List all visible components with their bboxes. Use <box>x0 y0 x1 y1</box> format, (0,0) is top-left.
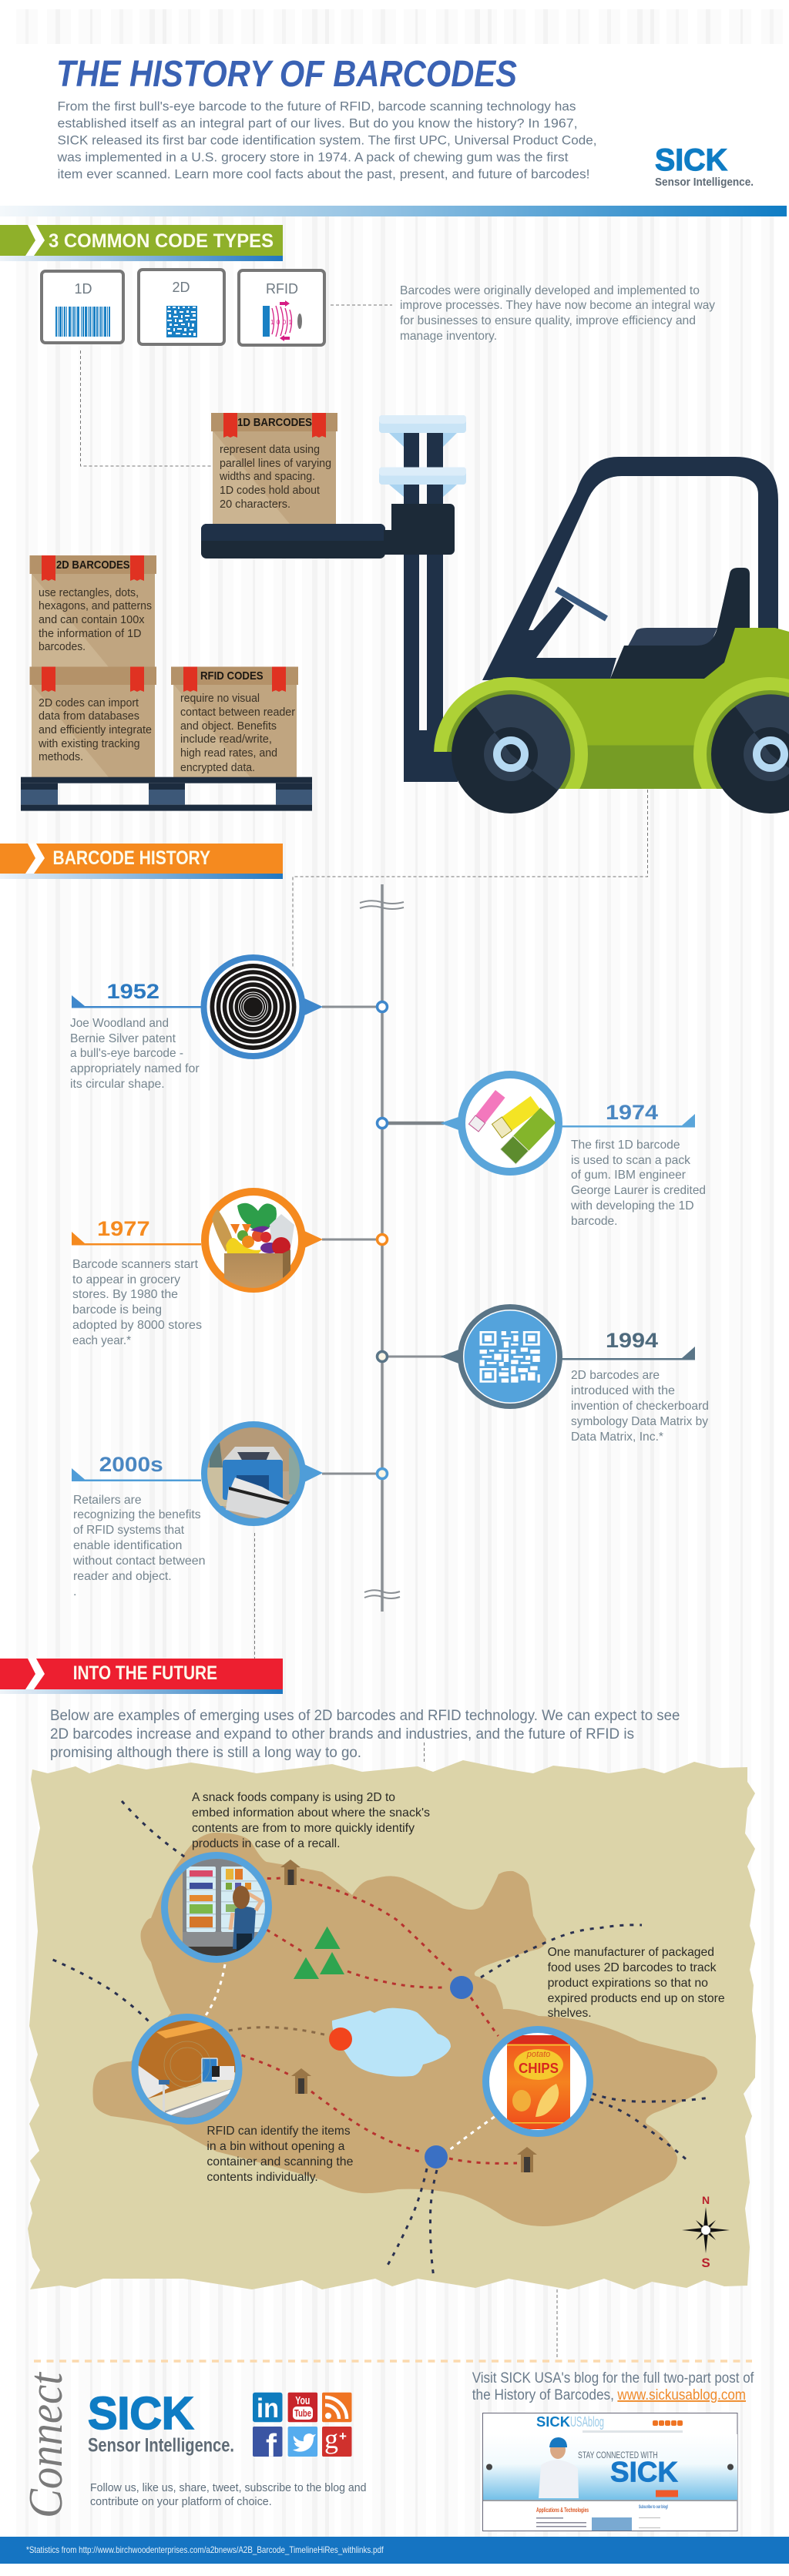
panel: treasure map <box>28 1760 756 2289</box>
follow us text: Follow us, like us, share, tweet, subscribe to the blog and <box>90 2481 367 2494</box>
huts <box>280 1860 537 2172</box>
rear fender <box>693 677 789 789</box>
map note: RFID bins <box>206 2125 354 2184</box>
compass: S <box>701 2256 710 2270</box>
SICK logo header <box>655 143 754 189</box>
icon: RFID reader photo <box>207 1427 300 1518</box>
box: RFID codes: and object. Benefits <box>180 719 277 733</box>
map note: RFID bins: container and scanning the <box>206 2155 354 2168</box>
intro paragraph: item ever scanned. Learn more cool facts about the past, present, and future of barcodes! <box>57 166 590 182</box>
panel: RFID code type: RFID <box>266 281 298 297</box>
screenshot hero <box>483 2434 737 2500</box>
blog screenshot: SICK <box>610 2456 678 2488</box>
compass <box>682 2194 730 2270</box>
map note: packaged food: product expirations so that no <box>548 1977 708 1990</box>
box: 2D barcodes top: and can contain 100x <box>39 613 145 626</box>
connector dashes <box>80 305 647 2360</box>
timeline: 1974: barcode. <box>571 1215 618 1228</box>
intro paragraph: From the first bull's-eye barcode to the future of RFID, barcode scanning technology has <box>57 99 576 114</box>
map note: snack foods <box>192 1791 430 1850</box>
timeline: 1994: 2D barcodes are <box>571 1369 660 1382</box>
connect divider <box>34 2360 752 2363</box>
box: RFID codes: include read/write, <box>180 733 272 746</box>
box: 2D barcodes bottom: with existing tracking <box>38 737 140 750</box>
photo: chips bag: CHIPS <box>519 2061 559 2076</box>
icon: YouTube: You <box>295 2394 310 2407</box>
lift forks light blue <box>379 415 466 497</box>
section header: 3 common code types <box>0 225 283 261</box>
timeline: 2000s: enable identification <box>73 1539 182 1552</box>
timeline: 2000s <box>72 1425 387 1598</box>
section header: into the future <box>0 1659 283 1694</box>
blog callout text: the History of Barcodes, <box>472 2387 614 2403</box>
icon: YouTube: Tube <box>294 2407 311 2419</box>
section header: into the future: INTO THE FUTURE <box>73 1662 217 1684</box>
blog callout text: Visit SICK USA's blog for the full two-part post of <box>472 2370 754 2386</box>
map paper <box>28 1760 756 2289</box>
map note: RFID bins: RFID can identify the items <box>206 2125 351 2138</box>
timeline: 1977: to appear in grocery <box>72 1273 180 1286</box>
box: 1D barcodes: 1D BARCODES <box>237 416 312 429</box>
panel: 1D code type: 1D <box>74 281 92 297</box>
timeline: 1974: with developing the 1D <box>570 1199 694 1213</box>
timeline: 1952: a bull's-eye barcode - <box>70 1047 183 1060</box>
box: RFID codes: contact between reader <box>180 706 295 719</box>
timeline: 1952: Joe Woodland and <box>70 1017 169 1030</box>
map note: RFID bins: contents individually. <box>206 2171 318 2184</box>
follow us text <box>90 2481 367 2508</box>
timeline: 1974: George Laurer is credited <box>571 1184 706 1197</box>
box: 2D barcodes top: 2D BARCODES <box>56 558 129 572</box>
mast <box>404 433 458 782</box>
carriage and fork arm <box>201 504 455 558</box>
timeline: 1952: its circular shape. <box>70 1078 165 1091</box>
icon: Twitter <box>288 2427 317 2457</box>
timeline: 1974: 1974 <box>606 1101 658 1124</box>
front wheel <box>452 694 570 813</box>
land mass <box>92 1833 717 2226</box>
front fender <box>434 677 588 789</box>
SICK logo header: SICK <box>655 143 727 177</box>
connect script heading: Connect <box>20 2371 72 2518</box>
icon: bull's-eye <box>200 954 305 1059</box>
photo: RFID bin <box>131 2014 243 2126</box>
timeline: 1977: each year.* <box>72 1334 131 1347</box>
photo: chips bag <box>482 2026 593 2137</box>
timeline: 1952 <box>70 954 387 1091</box>
intro paragraph: SICK released its first bar code identification system. The first UPC, Universal Product Code, <box>57 132 596 148</box>
SICK logo footer: Sensor Intelligence. <box>88 2434 234 2456</box>
map note: packaged food <box>548 1946 725 2020</box>
cab frame <box>482 457 778 680</box>
box: 1D barcodes: parallel lines of varying <box>220 457 331 470</box>
map note: snack foods: embed information about where the snack's <box>192 1806 430 1820</box>
icon: QR code <box>479 1331 540 1383</box>
map note: snack foods: A snack foods company is using 2D to <box>192 1791 395 1804</box>
routes red <box>242 1876 517 2163</box>
timeline: 2000s: recognizing the benefits <box>73 1508 201 1521</box>
map dots <box>329 1976 473 2168</box>
icon: LinkedIn: in <box>257 2393 279 2423</box>
timeline: 1974: The first 1D barcode <box>571 1139 680 1152</box>
timeline: 1952: 1952 <box>106 980 159 1003</box>
body <box>493 628 789 789</box>
screenshot logo: USAblog <box>570 2414 604 2430</box>
text: why barcodes: Barcodes were originally developed and implemented to <box>400 284 700 297</box>
map note: packaged food: One manufacturer of packaged <box>548 1946 714 1959</box>
timeline axis <box>360 884 404 1612</box>
box: 1D barcodes: 20 characters. <box>220 498 290 511</box>
timeline: 2000s: of RFID systems that <box>73 1524 185 1537</box>
timeline: 1994: symbology Data Matrix by <box>571 1415 708 1428</box>
icon: YouTube <box>288 2393 317 2422</box>
panel: RFID code type: 1001 <box>270 319 293 326</box>
text: why barcodes <box>400 284 715 343</box>
section header: barcode history: BARCODE HISTORY <box>52 847 210 869</box>
timeline: 2000s: 2000s <box>99 1453 163 1476</box>
forklift <box>201 415 789 831</box>
screenshot logo <box>536 2414 604 2430</box>
icon: Facebook: f <box>266 2427 277 2464</box>
panel: 2D code type <box>139 270 224 344</box>
map note: packaged food: food uses 2D barcodes to track <box>548 1961 717 1974</box>
panel: RFID code type <box>239 270 324 345</box>
blog screenshot <box>482 2413 737 2531</box>
box: 2D barcodes bottom <box>29 667 156 777</box>
SICK logo footer <box>88 2388 234 2456</box>
box: RFID codes: encrypted data. <box>180 761 255 774</box>
compass: N <box>702 2194 710 2206</box>
box: 2D barcodes bottom: and efficiently integrate <box>39 723 152 736</box>
text: why barcodes: for businesses to ensure quality, improve efficiency and <box>400 314 696 327</box>
panel: 2D code type: 2D <box>172 280 190 295</box>
icon: Google Plus <box>322 2423 351 2457</box>
timeline: 2000s: . <box>73 1585 76 1598</box>
intro paragraph: was implemented in a U.S. grocery store in 1974. A pack of chewing gum was the first <box>56 149 569 165</box>
box: 2D barcodes bottom: data from databases <box>39 709 139 723</box>
timeline: 1952: Bernie Silver patent <box>70 1032 176 1045</box>
timeline: 1977: Barcode scanners start <box>72 1258 199 1271</box>
text: why barcodes: manage inventory. <box>400 330 497 343</box>
timeline: 1994 <box>378 1304 709 1444</box>
map note: packaged food: expired products end up on store <box>548 1992 725 2005</box>
box: RFID codes: high read rates, and <box>180 746 277 760</box>
timeline: 1977: barcode is being <box>72 1303 162 1317</box>
text: future intro <box>50 1708 680 1761</box>
top gradient bar <box>0 206 787 216</box>
icon: Google Plus: + <box>339 2429 347 2444</box>
footer bar: *Statistics from http://www.birchwoodenterprises.com/a2bnews/A2B_Barcode_TimelineHiRes_withlinks.pdf <box>26 2544 384 2555</box>
timeline: 1974 <box>378 1075 706 1228</box>
trees <box>294 1927 344 1979</box>
timeline: 1974: is used to scan a pack <box>571 1154 691 1167</box>
seat <box>610 568 750 679</box>
pallet <box>21 777 312 811</box>
icon: Google Plus: g <box>324 2423 338 2454</box>
map note: snack foods: contents are from to more quickly identify <box>192 1822 415 1835</box>
blog screenshot: STAY CONNECTED WITH <box>578 2450 658 2460</box>
screenshot social <box>653 2420 683 2426</box>
photo: chips bag: potato <box>526 2050 550 2059</box>
title: THE HISTORY OF BARCODES <box>56 54 517 95</box>
section header: 3 common code types: 3 COMMON CODE TYPES <box>49 230 274 252</box>
box: RFID codes: RFID CODES <box>200 669 264 683</box>
screenshot man <box>539 2437 579 2498</box>
timeline: 1977: stores. By 1980 the <box>72 1288 178 1301</box>
box: 2D barcodes top: the information of 1D <box>39 627 142 640</box>
routes navy <box>53 1801 710 2278</box>
text: future intro: 2D barcodes increase and expand to other brands and industries, and the future of RFID is <box>50 1726 634 1742</box>
section header: barcode history <box>0 844 283 879</box>
box: RFID codes <box>171 667 298 777</box>
blog screenshot: Subscribe to our blog! <box>639 2505 668 2510</box>
screenshot logo: SICK <box>536 2414 570 2430</box>
lake <box>332 2008 451 2077</box>
timeline: 1977: adopted by 8000 stores <box>72 1319 202 1332</box>
timeline: 1994: 1994 <box>606 1329 658 1352</box>
box: 1D barcodes <box>211 413 337 524</box>
blog screenshot: Applications & Technologies <box>536 2507 589 2514</box>
timeline: 1974: of gum. IBM engineer <box>571 1169 687 1182</box>
timeline: 2000s: without contact between <box>72 1555 205 1568</box>
steering wheel <box>556 589 606 619</box>
SICK logo header: Sensor Intelligence. <box>655 176 754 189</box>
timeline: 1994: introduced with the <box>571 1384 675 1397</box>
routes white <box>205 1964 495 2149</box>
map note: RFID bins: in a bin without opening a <box>206 2140 345 2153</box>
box: RFID codes: require no visual <box>180 692 260 705</box>
blog callout text <box>472 2370 754 2403</box>
rear wheel <box>711 694 789 813</box>
photo: snack shopper <box>161 1852 272 1963</box>
route brown <box>229 2028 327 2035</box>
timeline: 1994: Data Matrix, Inc.* <box>571 1431 663 1444</box>
map note: packaged food: shelves. <box>548 2007 592 2020</box>
social icons <box>253 2393 351 2464</box>
map note: snack foods: products in case of a recall. <box>192 1837 341 1850</box>
box: 2D barcodes top: hexagons, and patterns <box>39 599 152 612</box>
footer bar <box>0 2537 789 2564</box>
timeline: 1994: invention of checkerboard <box>571 1400 709 1413</box>
timeline: 1952: appropriately named for <box>70 1062 200 1075</box>
text: future intro: promising although there is still a long way to go. <box>50 1745 361 1761</box>
text: future intro: Below are examples of emerging uses of 2D barcodes and RFID technology. We can expect to see <box>50 1708 680 1724</box>
icon: grocery bag <box>212 1203 294 1289</box>
box: 2D barcodes bottom: methods. <box>39 750 83 763</box>
blog callout text: www.sickusablog.com <box>617 2387 746 2403</box>
SICK logo footer: SICK <box>88 2388 194 2439</box>
timeline: 1977 <box>72 1192 387 1347</box>
text: why barcodes: improve processes. They have now become an integral way <box>400 299 715 312</box>
box: 2D barcodes top: barcodes. <box>39 640 86 653</box>
box: 1D barcodes: represent data using <box>220 443 320 456</box>
timeline: 2000s: reader and object. <box>73 1570 172 1583</box>
icon: gum packs <box>468 1090 556 1164</box>
timeline: 1977: 1977 <box>97 1217 150 1240</box>
box: 1D barcodes: 1D codes hold about <box>220 484 321 497</box>
panel: 1D code type <box>42 271 123 343</box>
box: 2D barcodes top: use rectangles, dots, <box>39 586 139 599</box>
icon: RSS <box>322 2393 351 2422</box>
box: 1D barcodes: widths and spacing. <box>219 470 315 483</box>
box: 2D barcodes bottom: 2D codes can import <box>39 696 139 709</box>
timeline: 2000s: Retailers are <box>73 1494 142 1507</box>
follow us text: contribute on your platform of choice. <box>90 2495 272 2508</box>
box: 2D barcodes top <box>29 555 156 667</box>
intro paragraph <box>56 99 597 182</box>
intro paragraph: established itself as an integral part of our lives. But do you know the history? In 1967, <box>57 116 578 131</box>
